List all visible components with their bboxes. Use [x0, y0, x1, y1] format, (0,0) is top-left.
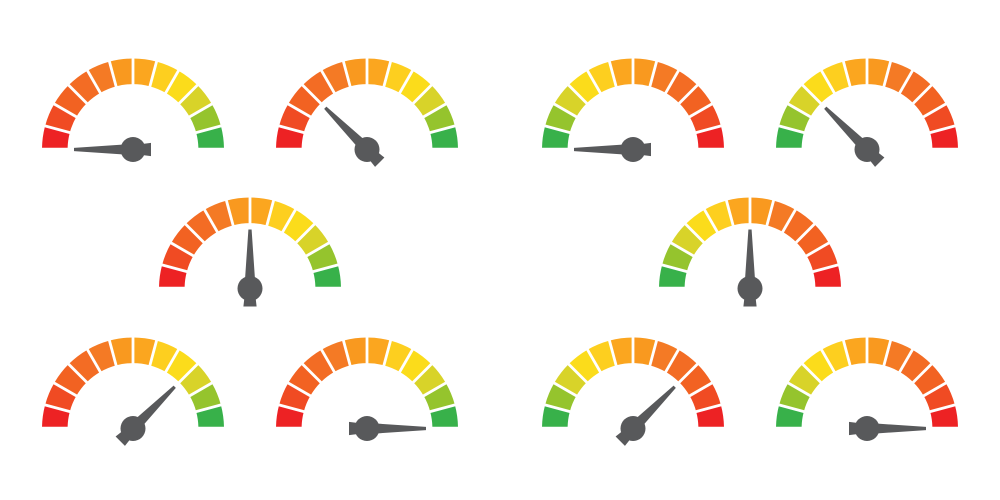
- segmented scale: [274, 54, 460, 150]
- segmented scale: [540, 332, 726, 428]
- needle: [849, 416, 926, 441]
- needle: [111, 378, 184, 450]
- needle: [316, 99, 389, 171]
- gauge: green to red, needle far right: [774, 332, 960, 441]
- needle: [738, 230, 762, 306]
- gauge: red to green, needle far right: [274, 332, 460, 441]
- needle: [816, 99, 889, 171]
- gauge: red to green, needle upper right: [40, 332, 226, 450]
- segmented scale: [274, 332, 460, 428]
- segmented scale: [40, 332, 226, 428]
- needle: [349, 416, 426, 441]
- gauge: red to green, needle far left: [40, 54, 226, 162]
- gauge: green to red, needle centered: [657, 192, 843, 306]
- needle: [574, 137, 651, 162]
- segmented scale: [540, 54, 726, 150]
- needle: [74, 137, 151, 162]
- segmented scale: [40, 54, 226, 150]
- segmented scale: [774, 54, 960, 150]
- segmented scale: [157, 192, 343, 288]
- gauge: green to red, needle upper left: [774, 54, 960, 171]
- segmented scale: [774, 332, 960, 428]
- gauge: red to green, needle centered: [157, 192, 343, 306]
- gauge: green to red, needle upper right: [540, 332, 726, 450]
- segmented scale: [657, 192, 843, 288]
- gauge: green to red, needle far left: [540, 54, 726, 162]
- needle: [238, 230, 262, 306]
- gauge: red to green, needle upper left: [274, 54, 460, 171]
- needle: [611, 378, 684, 450]
